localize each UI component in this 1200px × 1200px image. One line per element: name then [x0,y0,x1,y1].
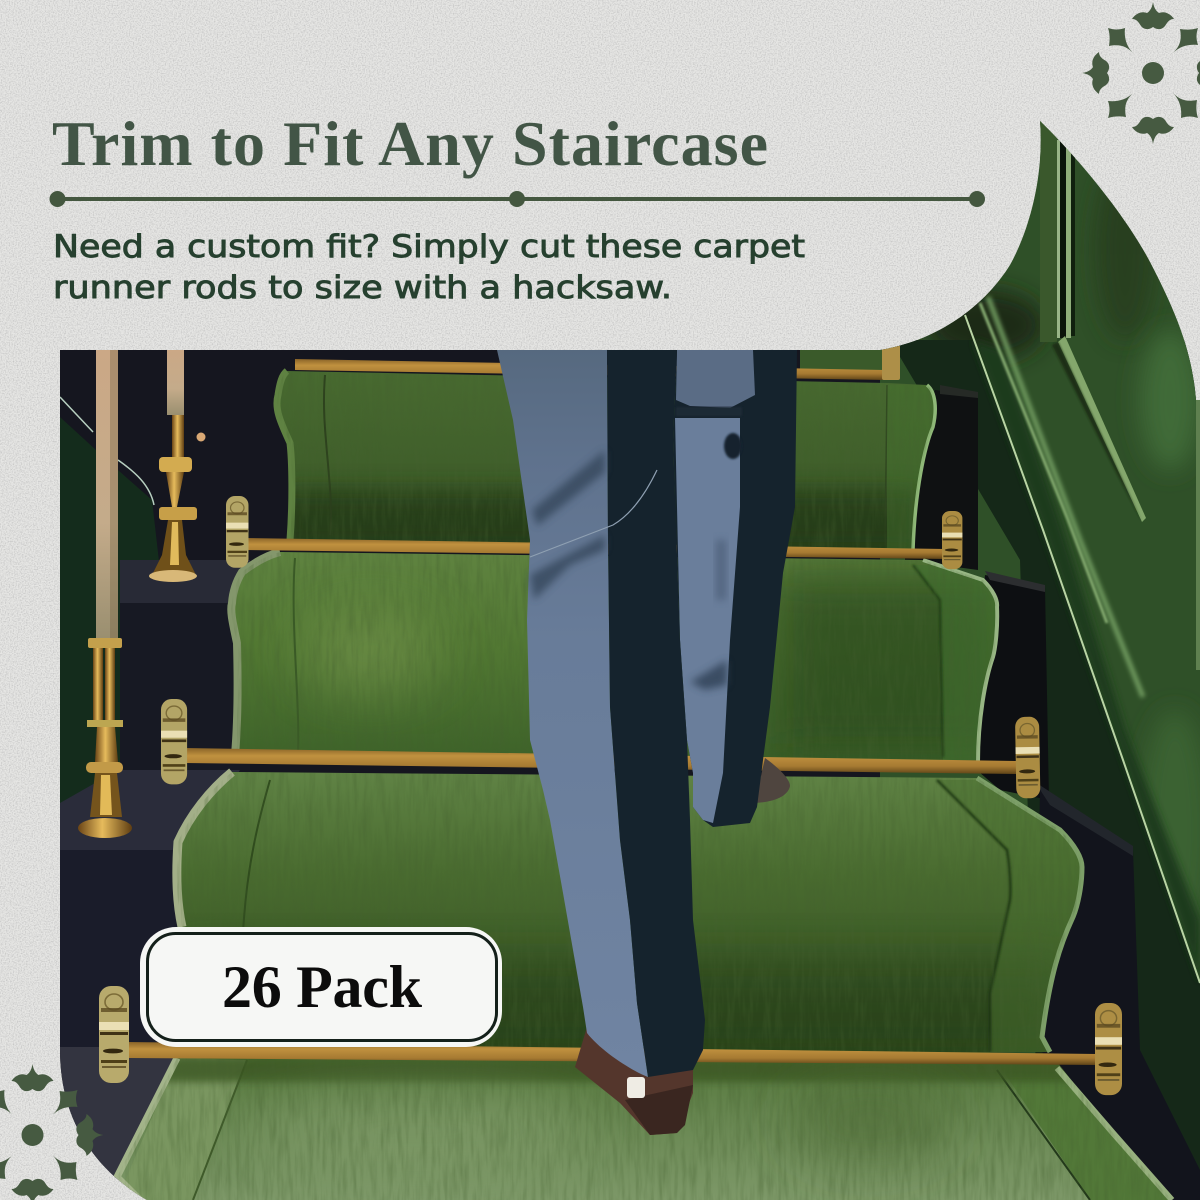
left wall and glass rail [60,397,160,805]
stair rods [129,345,1097,1065]
near baluster [78,350,132,838]
shoe highlight [627,1077,645,1098]
man's legs [497,350,797,1135]
description text [53,229,805,306]
badge: 26 pack: 26 Pack [222,954,423,1020]
title: Trim to Fit Any Staircase [52,108,768,179]
description text: Need a custom fit? Simply cut these carpet [53,229,805,265]
right wall with moulding [880,110,1200,1200]
carpet runner: top stair [277,350,937,555]
back shoe [755,758,790,803]
balusters [78,350,206,838]
corner ornament: top right [1082,2,1200,144]
front shoe [575,1027,693,1135]
corner ornament: bottom left [0,1064,104,1200]
dark stair treads and risers [60,385,1200,1200]
divider with three dots [50,191,985,207]
rod end brackets [99,496,1122,1095]
carpet runner: third stair [170,772,1090,1056]
back leg [673,350,797,827]
far baluster [149,350,206,582]
front leg [497,350,705,1077]
carpet runner: second stair [231,552,1010,762]
description text: runner rods to size with a hacksaw. [53,270,672,306]
carpet runner: bottom stair [117,1056,1180,1200]
badge: 26 pack [140,927,502,1047]
carpet pile texture [100,350,1200,1200]
